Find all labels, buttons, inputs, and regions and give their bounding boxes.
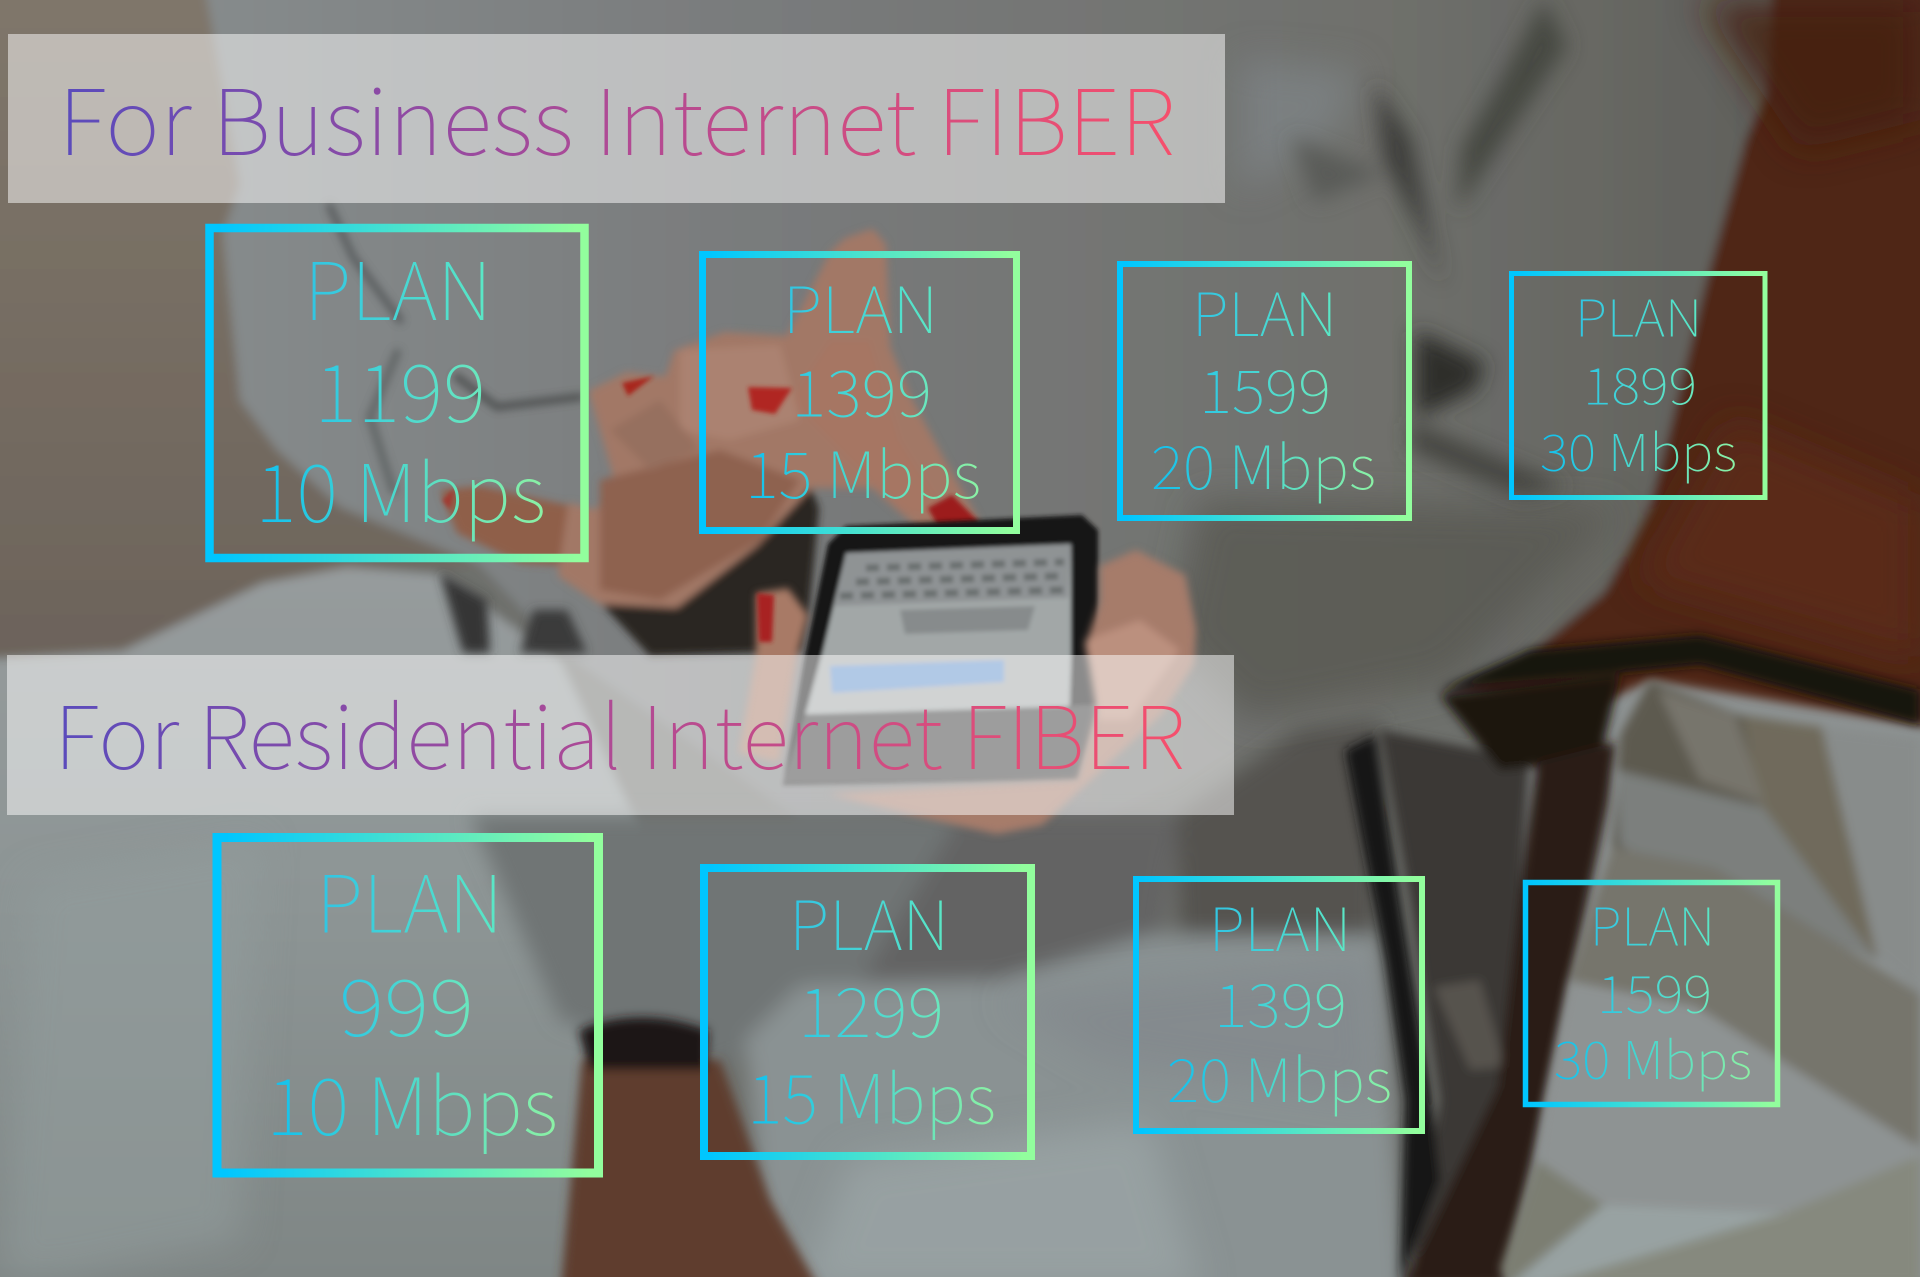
plan card: residential 1599 bbox=[1526, 882, 1778, 1104]
thumb bbox=[440, 486, 600, 580]
cardigan drape bbox=[1380, 730, 1530, 1277]
brown cushion bbox=[1443, 0, 1920, 760]
price: 999 bbox=[339, 944, 474, 1059]
price: 1199 bbox=[314, 330, 486, 446]
message text lines bbox=[900, 606, 1035, 634]
right hand and phone-side finger bbox=[739, 550, 1196, 834]
lower clothing: soft areas bbox=[470, 720, 1405, 1277]
phone bbox=[783, 515, 1100, 785]
heading: For Residential Internet FIBER: For Residential Internet FIBER bbox=[54, 669, 1185, 795]
price: 1599 bbox=[1199, 344, 1331, 431]
plan name: PLAN bbox=[1192, 267, 1337, 354]
price: 1899 bbox=[1583, 346, 1697, 420]
plan card: business 1899 bbox=[1512, 274, 1765, 498]
plan name: PLAN bbox=[316, 840, 503, 956]
nail on phone-side finger bbox=[757, 593, 774, 642]
sweater torso bbox=[202, 0, 1773, 820]
plan card: business 1599 bbox=[1120, 264, 1409, 518]
upper cardigan bbox=[1176, 720, 1380, 935]
chevron rug base bbox=[1480, 680, 1920, 1277]
dark band under cushion bbox=[1440, 675, 1620, 770]
chevron pattern bbox=[1500, 680, 1920, 1277]
sweater folds bbox=[330, 207, 580, 490]
white pants bbox=[745, 930, 1405, 1277]
speed: 20 Mbps bbox=[1167, 1033, 1392, 1120]
plan card: residential 1399 bbox=[1136, 879, 1422, 1131]
keyboard keys bbox=[840, 562, 1064, 596]
bare leg and dark shorts bbox=[561, 1018, 820, 1277]
plan name: PLAN bbox=[789, 871, 949, 970]
speed: 20 Mbps bbox=[1151, 420, 1376, 507]
speed: 15 Mbps bbox=[747, 1044, 996, 1144]
dark skin stripe bbox=[1403, 742, 1616, 1277]
price: 1399 bbox=[1214, 958, 1347, 1045]
drape shadows bbox=[440, 573, 490, 653]
couch bbox=[0, 0, 480, 660]
hand palm and pointing finger bbox=[560, 231, 977, 606]
gathered shirt centre bbox=[470, 815, 1080, 1070]
price: 1399 bbox=[791, 344, 932, 436]
price: 1599 bbox=[1597, 953, 1712, 1028]
speed: 30 Mbps bbox=[1554, 1019, 1752, 1094]
plan card: business 1199 bbox=[210, 228, 584, 558]
speed: 10 Mbps bbox=[266, 1043, 558, 1158]
plan card: business 1399 bbox=[702, 254, 1016, 530]
white shirt left bbox=[0, 567, 640, 1277]
plan name: PLAN bbox=[783, 260, 938, 352]
speed: 15 Mbps bbox=[745, 425, 981, 517]
message bubble bbox=[830, 660, 1004, 693]
price: 1299 bbox=[798, 958, 944, 1057]
speed: 10 Mbps bbox=[255, 430, 546, 546]
plan card: residential 1299 bbox=[704, 868, 1031, 1156]
left sleeve cuff bbox=[600, 486, 819, 656]
nails bbox=[442, 376, 978, 544]
speed: 30 Mbps bbox=[1540, 412, 1737, 486]
plan name: PLAN bbox=[1575, 278, 1702, 352]
heading band: residential bbox=[7, 655, 1234, 815]
plan card: residential 999 bbox=[217, 838, 598, 1173]
heading band: business bbox=[8, 34, 1225, 203]
left hand bbox=[440, 231, 977, 656]
plan name: PLAN bbox=[1209, 882, 1351, 969]
heading: For Business Internet FIBER: For Business Internet FIBER bbox=[58, 50, 1175, 182]
plan name: PLAN bbox=[1590, 886, 1715, 961]
plan name: PLAN bbox=[304, 228, 492, 344]
